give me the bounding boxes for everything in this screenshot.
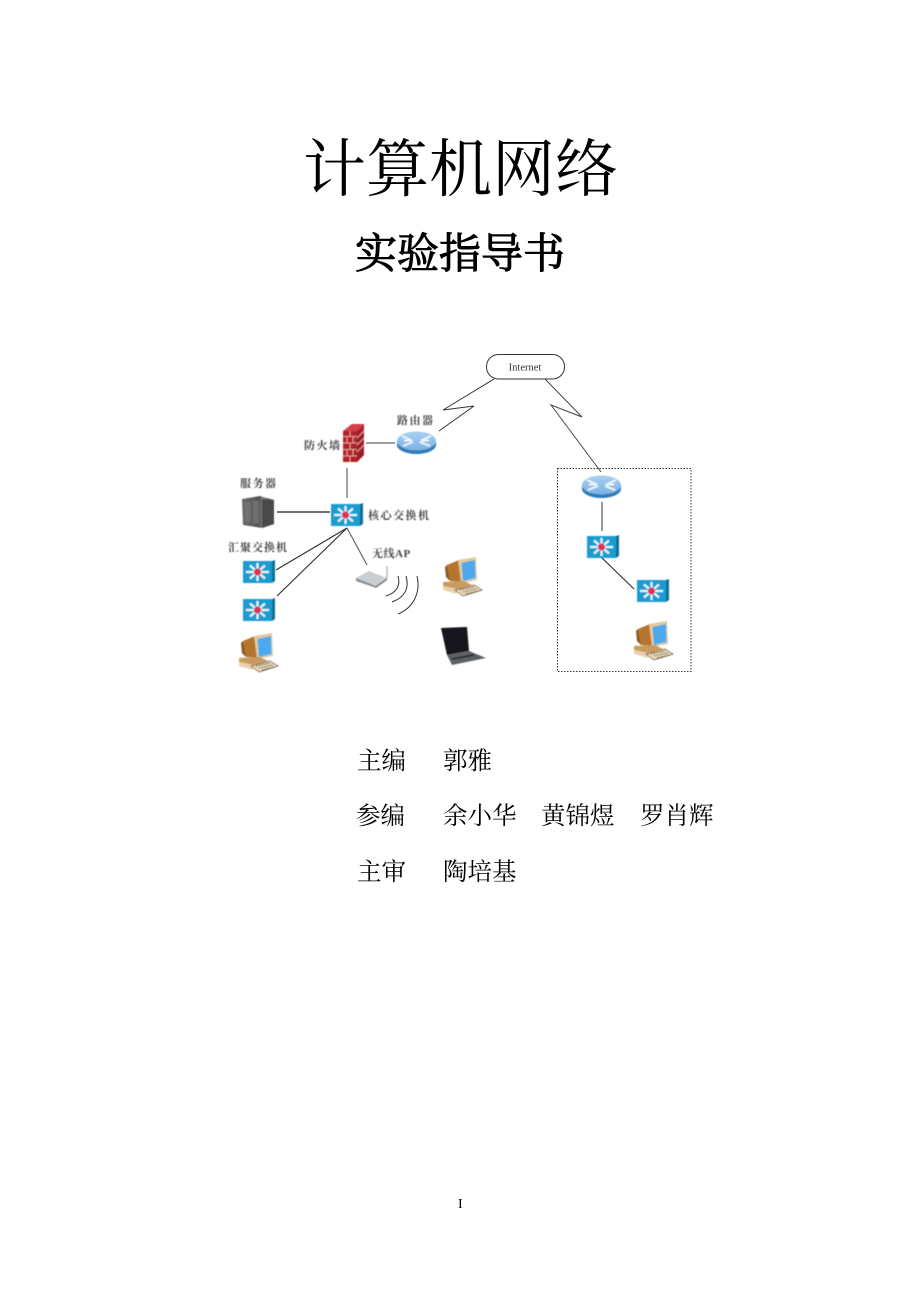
connection lines	[276, 443, 634, 596]
diagram labels: 汇聚交换机	[228, 540, 288, 554]
icon: aggregation switch	[243, 598, 275, 621]
icon: laptop	[441, 627, 486, 665]
icon: core switch	[331, 503, 363, 526]
internet cloud	[486, 354, 564, 379]
diagram labels: 服务器	[240, 476, 278, 490]
credits	[356, 748, 714, 886]
diagram labels	[228, 413, 434, 560]
icon: branch router	[582, 476, 621, 498]
reviewer name: 陶培基	[443, 859, 516, 886]
icon: firewall	[343, 424, 364, 462]
icon: wireless AP	[356, 566, 387, 588]
chief editor name: 郭雅	[443, 748, 492, 775]
diagram labels: 路由器	[397, 413, 434, 427]
icon: branch access switch	[637, 579, 669, 602]
icon: branch switch	[587, 535, 619, 558]
icon: router	[397, 432, 436, 454]
contributing editor name: 黄锦煜	[541, 803, 614, 830]
right lightning link	[545, 379, 601, 472]
icon: server	[242, 496, 274, 528]
chief editor role: 主编	[357, 748, 406, 775]
icon: computer	[443, 557, 482, 596]
contributing editor name: 罗肖辉	[640, 803, 714, 830]
contributing editors names: 余小华	[443, 803, 516, 830]
internet cloud: Internet	[509, 362, 541, 374]
icon: computer	[239, 633, 278, 672]
reviewer role: 主审	[357, 859, 406, 886]
diagram labels: 防火墙	[304, 438, 342, 452]
icon: wireless signal arcs	[386, 576, 418, 614]
left lightning link	[439, 379, 494, 431]
dashed branch boundary	[558, 468, 691, 672]
icon: aggregation switch	[243, 560, 275, 583]
title: 计算机网络	[303, 135, 618, 205]
icon: branch computer	[634, 621, 673, 660]
page number: I	[458, 1197, 463, 1212]
subtitle: 实验指导书	[355, 232, 565, 278]
contributing editors role: 参编	[356, 803, 405, 830]
diagram labels: 核心交换机	[368, 508, 430, 522]
diagram labels: 无线AP	[372, 546, 411, 560]
